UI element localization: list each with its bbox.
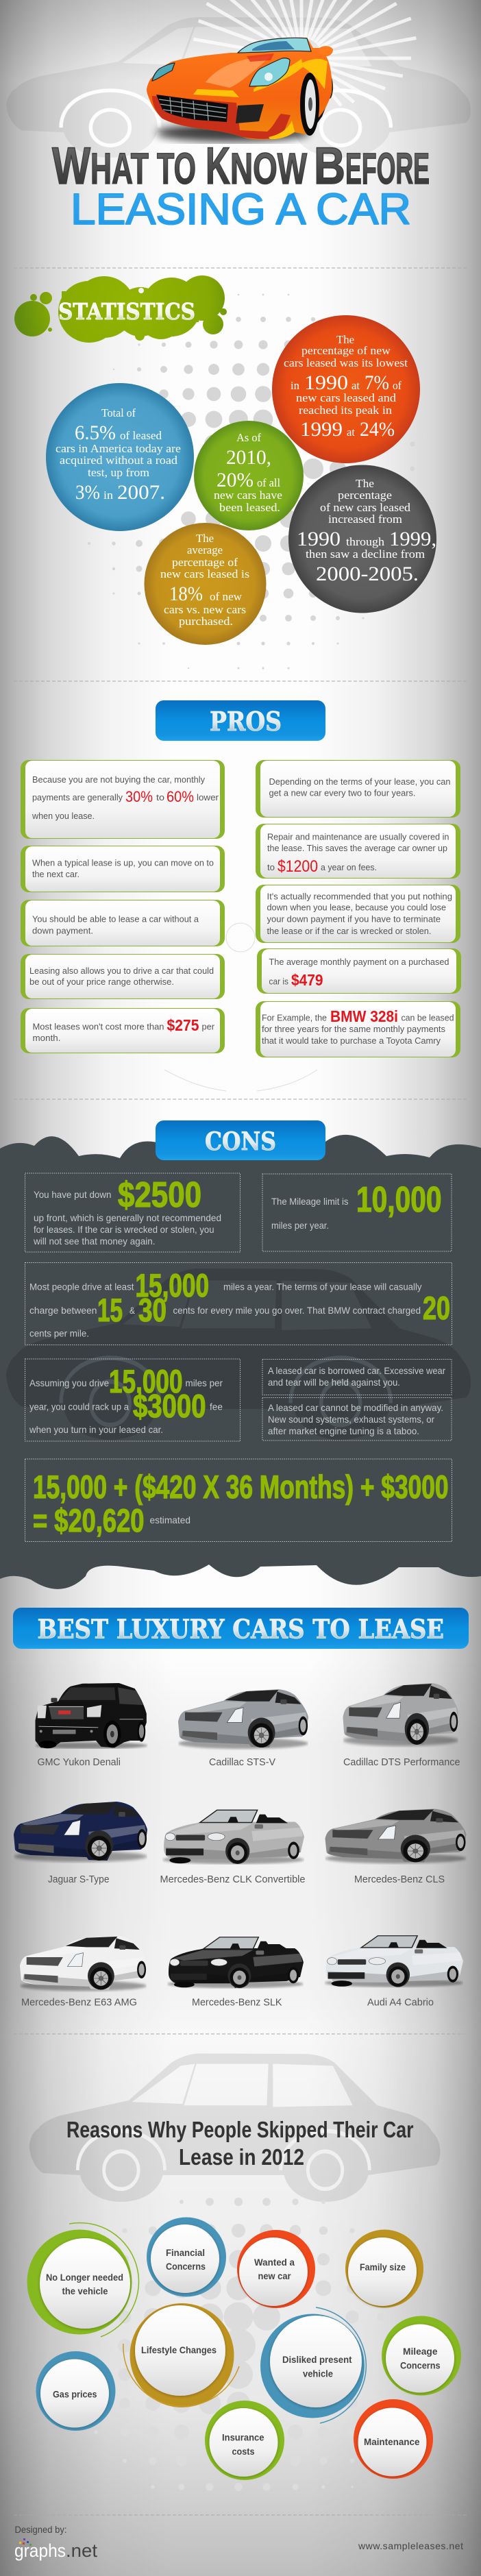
con box: excess mileage charges: cents per mile. bbox=[29, 1328, 89, 1339]
stat bubble: grey, 1990 through 1999: of new cars leased bbox=[320, 501, 411, 514]
stat bubble: grey, 1990 through 1999: The bbox=[356, 477, 374, 490]
pros heading bbox=[156, 700, 325, 741]
reason: gas prices: Gas prices bbox=[53, 2389, 97, 2400]
con box: no modifications: New sound systems, exhaust systems, or bbox=[268, 1414, 434, 1425]
con box: excess mileage charges bbox=[25, 1262, 452, 1345]
con box: excess mileage charges: cents for every mile you go over. That BMW contract charged bbox=[173, 1305, 421, 1316]
reason: mileage concerns: Mileage bbox=[403, 2346, 438, 2357]
con box: no modifications bbox=[262, 1398, 452, 1440]
con box: $2500 up front: will not see that money again. bbox=[33, 1236, 156, 1247]
pro card: $479 average payment: car is bbox=[269, 976, 288, 987]
footer: designer credit: Designed by: bbox=[15, 2524, 67, 2535]
pro card: no down payment bbox=[21, 900, 225, 946]
pro card: monthly payments: lower bbox=[197, 792, 219, 802]
stat bubble: green, 2010: of all bbox=[257, 476, 280, 489]
pro card: monthly payments: to bbox=[156, 792, 164, 802]
stat bubble: gold, 18 percent: of new bbox=[210, 590, 243, 603]
reason: lifestyle changes bbox=[123, 2303, 239, 2407]
stat bubble: blue, no road test: 3% bbox=[75, 481, 100, 504]
stat bubble: orange, lowest and peak: The bbox=[336, 333, 354, 346]
pro card: repair and maintenance: the lease. This saves the average car owner up bbox=[267, 843, 447, 853]
con box: excess mileage charges: 15,000 bbox=[136, 1267, 209, 1303]
car: GMC Yukon Denali: GMC Yukon Denali bbox=[37, 1756, 121, 1768]
pro card: BMW 328i example: For Example, the bbox=[262, 1013, 327, 1022]
stat bubble: gold, 18 percent: purchased. bbox=[179, 615, 233, 628]
reason: maintenance: Maintenance bbox=[364, 2436, 420, 2447]
con box: mileage limit: miles per year. bbox=[271, 1220, 329, 1231]
stat bubble: gold, 18 percent bbox=[144, 523, 266, 645]
con box: $3000 fee: Assuming you drive bbox=[29, 1377, 109, 1388]
stat bubble: green, 2010: 2010, bbox=[226, 446, 271, 469]
reason: insurance costs: Insurance bbox=[222, 2431, 264, 2442]
reason: financial concerns bbox=[147, 2218, 226, 2297]
reason: gas prices bbox=[36, 2351, 115, 2431]
stat bubble: blue, no road test: Total of bbox=[101, 406, 136, 419]
pros heading: PROS bbox=[210, 706, 282, 737]
con box: excess mileage charges: charge between bbox=[29, 1305, 97, 1316]
pro card: repair and maintenance: $1200 bbox=[278, 857, 318, 876]
main title: What to Know Before: TO bbox=[157, 144, 196, 193]
cons: car silhouette bbox=[6, 1268, 471, 1440]
divider bbox=[14, 680, 467, 682]
con box: total cost estimate bbox=[25, 1459, 452, 1542]
car: Mercedes-Benz E63 AMG bbox=[20, 1936, 147, 2008]
con box: $2500 up front: up front, which is generally not recommended bbox=[34, 1212, 221, 1223]
stat bubble: orange, lowest and peak: 1999 bbox=[300, 418, 343, 441]
con box: mileage limit: The Mileage limit is bbox=[271, 1196, 348, 1207]
con box: excess mileage charges: & bbox=[130, 1305, 136, 1316]
pro card: $479 average payment: The average monthly payment on a purchased bbox=[269, 957, 449, 967]
pro card: $275 per month bbox=[21, 1008, 225, 1053]
stat bubble: green, 2010: been leased. bbox=[219, 501, 280, 514]
pro card: BMW 328i example: BMW 328i bbox=[330, 1007, 398, 1025]
car: Mercedes-Benz CLK Convertible: Mercedes-Benz CLK Convertible bbox=[160, 1874, 306, 1885]
reason: wanted a new car: new car bbox=[258, 2270, 291, 2281]
pros background wireframe bbox=[164, 923, 317, 1091]
subtitle: Leasing a Car: LEASING A CAR bbox=[71, 184, 411, 234]
pro card: nothing down: the lease or if the car is wrecked or stolen. bbox=[267, 926, 432, 936]
stat bubble: gold, 18 percent: new cars leased is bbox=[160, 567, 249, 580]
pro card: nothing down bbox=[256, 885, 460, 943]
pro card: monthly payments bbox=[21, 760, 225, 839]
icon: coloured pixel dots bbox=[19, 2538, 32, 2546]
stat bubble: orange, lowest and peak: of bbox=[393, 379, 402, 392]
con box: wear and tear bbox=[262, 1360, 452, 1395]
car: Mercedes-Benz SLK: Mercedes-Benz SLK bbox=[192, 1997, 282, 2008]
stat bubble: green, 2010: 20% bbox=[217, 469, 254, 491]
pro card: nothing down: down when you lease, because you could lose bbox=[267, 902, 446, 913]
car: Mercedes-Benz CLS: Mercedes-Benz CLS bbox=[354, 1874, 445, 1885]
pro card: repair and maintenance bbox=[256, 824, 460, 879]
main title: What to Know Before: B bbox=[314, 137, 345, 195]
footer: website url: www.sampleleases.net bbox=[358, 2540, 463, 2551]
con box: no modifications: A leased car cannot be modified in anyway. bbox=[268, 1402, 443, 1413]
stat bubble: grey, 1990 through 1999: 1990 bbox=[297, 528, 341, 550]
pro card: monthly payments: when you lease. bbox=[32, 811, 95, 821]
pro card: BMW 328i example bbox=[256, 1001, 460, 1057]
pro card: monthly payments: Because you are not buying the car, monthly bbox=[32, 774, 205, 785]
pro card: price range: be out of your price range otherwise. bbox=[29, 977, 174, 987]
reason: insurance costs: costs bbox=[232, 2446, 255, 2457]
con box: $3000 fee bbox=[25, 1359, 240, 1441]
stat bubble: orange, lowest and peak: new cars leased and bbox=[296, 391, 397, 404]
pro card: no down payment: You should be able to lease a car without a bbox=[32, 914, 199, 924]
stat bubble: orange, lowest and peak: in bbox=[291, 379, 299, 392]
con box: excess mileage charges: 20 bbox=[423, 1290, 450, 1326]
pro card: next car: When a typical lease is up, you can move on to bbox=[32, 858, 214, 868]
pro card: no down payment: down payment. bbox=[32, 925, 93, 936]
pro card: BMW 328i example: can be leased bbox=[402, 1013, 454, 1022]
reason: family size bbox=[345, 2230, 423, 2308]
stat bubble: gold, 18 percent: The bbox=[196, 532, 214, 545]
divider bbox=[14, 2514, 467, 2516]
stat bubble: orange, lowest and peak bbox=[272, 315, 420, 463]
con box: no modifications: after market engine tuning is a taboo. bbox=[268, 1425, 419, 1436]
reasons: title: Lease in 2012 bbox=[179, 2144, 304, 2170]
reason: no longer needed the vehicle: No Longer needed bbox=[46, 2272, 123, 2283]
stat bubble: grey, 1990 through 1999 bbox=[288, 465, 436, 613]
pro card: nothing down: It's actually recommended that you put nothing bbox=[267, 891, 452, 902]
cons heading bbox=[156, 1120, 325, 1160]
con box: mileage limit bbox=[262, 1174, 452, 1251]
con box: $3000 fee: $3000 bbox=[133, 1388, 206, 1424]
reason: no longer needed the vehicle: the vehicle bbox=[62, 2285, 108, 2296]
best luxury cars heading bbox=[13, 1608, 469, 1649]
stat bubble: gold, 18 percent: average bbox=[187, 543, 223, 556]
main title: What to Know Before bbox=[52, 137, 430, 195]
stat bubble: grey, 1990 through 1999: percentage bbox=[338, 489, 392, 502]
reasons: ghost car bbox=[29, 2053, 440, 2202]
pro card: monthly payments: payments are generally bbox=[32, 792, 123, 802]
halftone dots: reasons background bbox=[92, 2198, 385, 2491]
car: Cadillac STS-V bbox=[178, 1689, 308, 1768]
car: Mercedes-Benz SLK bbox=[167, 1937, 304, 2008]
car: Cadillac DTS Performance: Cadillac DTS Performance bbox=[343, 1756, 460, 1768]
car: Audi A4 Cabrio: Audi A4 Cabrio bbox=[367, 1997, 434, 2008]
hero: sunburst rays bbox=[193, 0, 416, 106]
footer: designer credit bbox=[14, 2524, 97, 2561]
reason: financial concerns: Concerns bbox=[166, 2261, 206, 2272]
pro card: next car bbox=[21, 846, 225, 892]
con box: excess mileage charges: Most people drive at least bbox=[29, 1281, 134, 1292]
stat bubble: grey, 1990 through 1999: 2000-2005. bbox=[316, 563, 419, 585]
reason: disliked present vehicle: Disliked present bbox=[282, 2354, 352, 2365]
footer: designer credit: .net bbox=[66, 2540, 97, 2561]
pro card: $275 per month: Most leases won't cost more than bbox=[33, 1021, 164, 1032]
pro card: $479 average payment: $479 bbox=[291, 971, 323, 989]
pro card: next car: the next car. bbox=[32, 869, 79, 879]
divider bbox=[14, 2033, 467, 2035]
stat bubble: orange, lowest and peak: 7% bbox=[365, 371, 389, 394]
pro card: monthly payments: 30% bbox=[125, 788, 153, 805]
stat bubble: blue, no road test: 2007. bbox=[117, 481, 165, 504]
reason: lifestyle changes: Lifestyle Changes bbox=[141, 2344, 217, 2355]
con box: $2500 up front: $2500 bbox=[118, 1175, 201, 1215]
car: Jaguar S-Type bbox=[14, 1802, 147, 1885]
hero: ghost car silhouette bbox=[6, 17, 471, 158]
stat bubble: orange, lowest and peak: percentage of new bbox=[301, 344, 391, 357]
halftone dots: statistics background bbox=[88, 294, 415, 670]
reason: maintenance bbox=[354, 2399, 433, 2479]
con box: wear and tear: A leased car is borrowed car. Excessive wear bbox=[268, 1365, 445, 1376]
reason: financial concerns: Financial bbox=[166, 2247, 205, 2258]
stat bubble: orange, lowest and peak: cars leased was its lowest bbox=[284, 356, 408, 369]
cons dark cloud panel bbox=[0, 1135, 481, 1589]
car: Audi A4 Cabrio bbox=[325, 1936, 463, 2008]
con box: $2500 up front: You have put down bbox=[34, 1189, 111, 1200]
car: Mercedes-Benz CLS bbox=[325, 1809, 466, 1885]
cons heading: CONS bbox=[205, 1127, 276, 1156]
pro card: repair and maintenance: to bbox=[267, 862, 275, 872]
pro card: $275 per month: per bbox=[201, 1021, 215, 1032]
car: Cadillac DTS Performance bbox=[343, 1683, 460, 1768]
stat bubble: green, 2010: As of bbox=[236, 431, 261, 444]
pro card: nothing down: your down payment if you have to terminate bbox=[267, 914, 441, 924]
stat bubble: blue, no road test: of leased bbox=[120, 429, 162, 442]
pro card: $275 per month: $275 bbox=[167, 1016, 199, 1034]
main title: What to Know Before: K bbox=[206, 137, 230, 195]
con box: $3000 fee: fee bbox=[210, 1401, 223, 1412]
reason: mileage concerns: Concerns bbox=[400, 2360, 441, 2371]
con box: mileage limit: 10,000 bbox=[356, 1180, 441, 1220]
stat bubble: orange, lowest and peak: reached its peak in bbox=[299, 404, 393, 417]
stat bubble: orange, lowest and peak: 24% bbox=[360, 418, 395, 441]
stat bubble: blue, no road test: acquired without a road bbox=[60, 454, 178, 467]
pro card: new car every two to four years bbox=[256, 760, 460, 818]
pro card: BMW 328i example: for three years for the same monthly payments bbox=[262, 1024, 445, 1034]
pro card: $275 per month: month. bbox=[33, 1033, 60, 1043]
car: Jaguar S-Type: Jaguar S-Type bbox=[48, 1874, 110, 1885]
statistics heading blob bbox=[14, 275, 227, 343]
stat bubble: grey, 1990 through 1999: 1999, bbox=[389, 528, 436, 550]
stat bubble: grey, 1990 through 1999: through bbox=[346, 535, 385, 548]
reason: wanted a new car bbox=[237, 2230, 315, 2308]
con box: $2500 up front: for leases. If the car is wrecked or stolen, you bbox=[34, 1224, 214, 1235]
hero: orange sports car bbox=[147, 38, 333, 142]
pro card: price range bbox=[21, 954, 225, 999]
footer: designer credit: graphs bbox=[14, 2540, 66, 2561]
con box: $2500 up front bbox=[25, 1173, 240, 1252]
reason: mileage concerns bbox=[382, 2316, 461, 2396]
main title: What to Know Before: NOW bbox=[230, 144, 307, 193]
stat bubble: green, 2010: new cars have bbox=[214, 489, 282, 502]
pro card: $479 average payment bbox=[257, 948, 461, 994]
stat bubble: gold, 18 percent: cars vs. new cars bbox=[164, 603, 246, 616]
con box: wear and tear: and tear will be held against you. bbox=[268, 1377, 400, 1388]
con box: $3000 fee: 15,000 bbox=[109, 1363, 182, 1399]
reason: disliked present vehicle bbox=[260, 2307, 366, 2423]
con box: $3000 fee: year, you could rack up a bbox=[29, 1401, 129, 1412]
stat bubble: blue, no road test: in bbox=[103, 489, 114, 502]
stat bubble: blue, no road test: 6.5% bbox=[75, 421, 116, 444]
stat bubble: orange, lowest and peak: at bbox=[347, 426, 355, 439]
pro card: new car every two to four years: Depending on the terms of your lease, you can bbox=[269, 776, 451, 787]
con box: excess mileage charges: 30 bbox=[138, 1292, 166, 1328]
pro card: BMW 328i example: that it would take to purchase a Toyota Camry bbox=[262, 1035, 441, 1046]
con box: total cost estimate: estimated bbox=[149, 1514, 190, 1525]
pro card: monthly payments: 60% bbox=[166, 788, 194, 805]
reason: family size: Family size bbox=[360, 2261, 406, 2272]
con box: total cost estimate: = $20,620 bbox=[33, 1502, 144, 1538]
divider bbox=[14, 267, 467, 269]
con box: $3000 fee: when you turn in your leased car. bbox=[29, 1424, 163, 1435]
stat bubble: blue, no road test: cars in America today are bbox=[56, 442, 181, 455]
car: Mercedes-Benz E63 AMG: Mercedes-Benz E63 AMG bbox=[21, 1997, 137, 2008]
stat bubble: grey, 1990 through 1999: then saw a decline from bbox=[306, 548, 425, 561]
stat bubble: blue, no road test: test, up from bbox=[88, 466, 149, 479]
car: Cadillac STS-V: Cadillac STS-V bbox=[209, 1756, 275, 1768]
stat bubble: orange, lowest and peak: at bbox=[352, 379, 360, 392]
stat bubble: grey, 1990 through 1999: increased from bbox=[328, 513, 402, 526]
stat bubble: blue, no road test bbox=[46, 383, 194, 531]
pro card: price range: Leasing also allows you to drive a car that could bbox=[29, 966, 214, 976]
car: Mercedes-Benz CLK Convertible bbox=[160, 1810, 306, 1885]
pro card: new car every two to four years: get a new car every two to four years. bbox=[269, 788, 415, 798]
statistics heading text: STATISTICS bbox=[58, 298, 195, 325]
con box: excess mileage charges: miles a year. The terms of your lease will casually bbox=[223, 1281, 422, 1292]
reason: insurance costs bbox=[205, 2401, 284, 2480]
main title: What to Know Before: HAT bbox=[90, 144, 149, 193]
stat bubble: green, 2010 bbox=[194, 421, 304, 530]
stat bubble: orange, lowest and peak: 1990 bbox=[304, 371, 348, 394]
car: GMC Yukon Denali bbox=[36, 1683, 148, 1768]
stat bubble: gold, 18 percent: 18% bbox=[169, 582, 203, 605]
reasons: title bbox=[66, 2117, 414, 2170]
stat bubble: gold, 18 percent: percentage of bbox=[172, 556, 238, 569]
reason: wanted a new car: Wanted a bbox=[254, 2257, 295, 2268]
pro card: repair and maintenance: a year on fees. bbox=[321, 862, 377, 872]
con box: excess mileage charges: 15 bbox=[97, 1292, 123, 1328]
divider bbox=[14, 1099, 467, 1100]
reason: disliked present vehicle: vehicle bbox=[303, 2368, 333, 2379]
pro card: repair and maintenance: Repair and maintenance are usually covered in bbox=[267, 832, 449, 842]
reason: no longer needed the vehicle bbox=[27, 2223, 138, 2337]
main title: What to Know Before: W bbox=[52, 137, 90, 195]
con box: $3000 fee: miles per bbox=[185, 1377, 223, 1388]
